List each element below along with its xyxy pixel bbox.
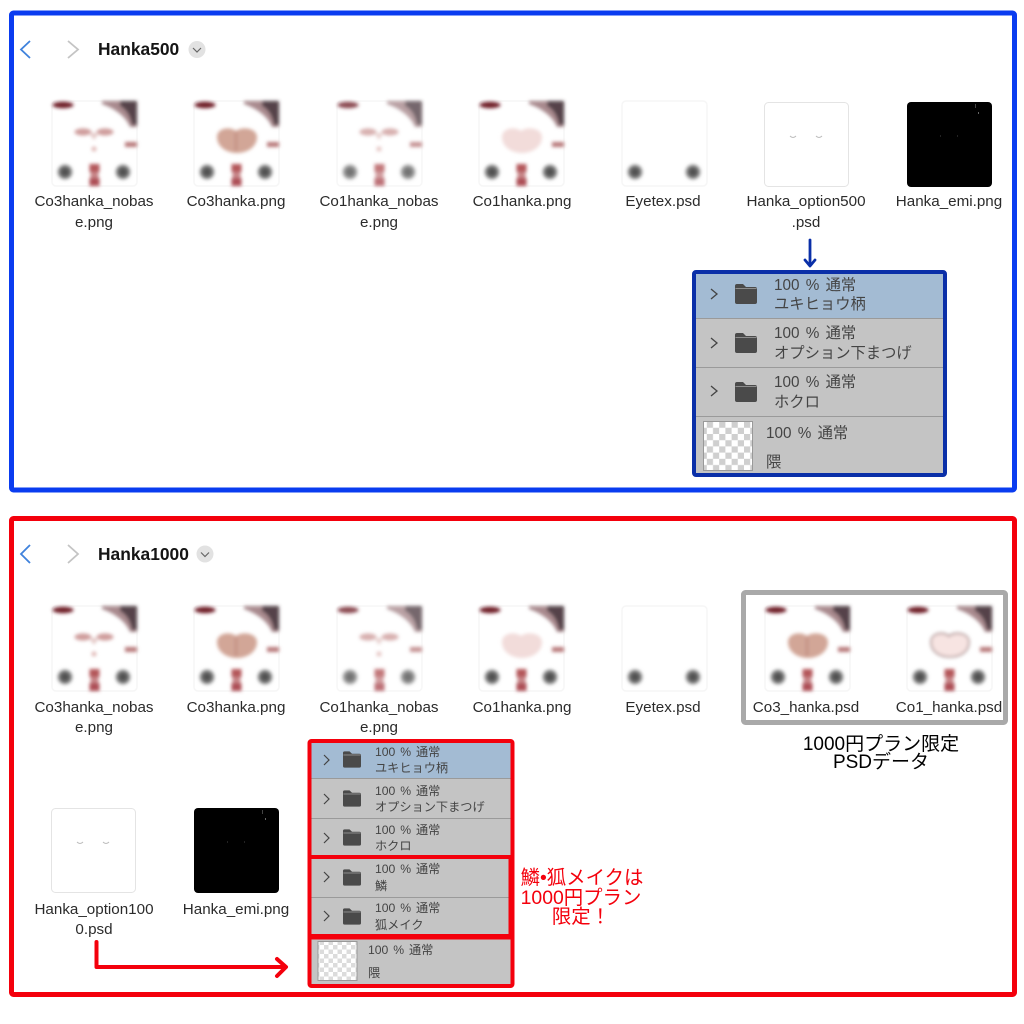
icon: back chevron	[21, 41, 30, 58]
file: Co3hanka.png	[187, 101, 285, 210]
panel: Hanka1000 folder	[12, 518, 1014, 994]
layer: ホクロ: ホクロ	[375, 839, 412, 853]
arrow: down to layers	[805, 240, 815, 266]
file: Co1hanka.png	[473, 101, 571, 210]
file: Eyetex.psd	[622, 606, 707, 716]
file: Co3_hanka.psd	[753, 606, 859, 716]
layer: ホクロ: ホクロ	[774, 394, 820, 411]
file: Hanka_emi.png	[183, 808, 289, 918]
file: Hanka_option500.psd	[746, 102, 866, 231]
layer: ユキヒョウ柄: ユキヒョウ柄	[774, 296, 866, 313]
layer: 隈: 100 % 通常	[766, 425, 848, 442]
outline: 1000 plan layers	[310, 857, 510, 936]
file: Co1_hanka.psd	[896, 606, 1002, 716]
callout: limited to 1000 yen plan: 1000円プラン	[521, 887, 641, 909]
file: Co1hanka_nobase.png	[319, 606, 439, 736]
file: Hanka_emi.png	[896, 102, 1002, 210]
layer: ホクロ	[324, 823, 440, 853]
layer: 隈	[704, 422, 848, 471]
file: Co1hanka_nobase.png: Co1hanka_nobas	[319, 193, 439, 210]
layer: ユキヒョウ柄: ユキヒョウ柄	[375, 761, 448, 775]
layer: 隈: 隈	[368, 966, 380, 980]
layer: オプション下まつげ	[324, 784, 485, 814]
file: Co1hanka.png	[473, 606, 571, 716]
file: Eyetex.psd	[622, 101, 707, 210]
file: Co1hanka.png: Co1hanka.png	[473, 699, 571, 716]
caption: PSD data: 1000円プラン限定	[803, 733, 959, 755]
heading: Hanka1000: Hanka1000	[98, 544, 189, 564]
icon: dropdown button	[188, 41, 206, 58]
file: Hanka_emi.png: Hanka_emi.png	[183, 901, 289, 918]
layer: ユキヒョウ柄	[696, 274, 943, 318]
arrow: option file to layers	[96, 942, 286, 976]
layer: 隈: 100 % 通常	[368, 943, 433, 957]
file: Co3hanka_nobase.png	[34, 101, 154, 231]
callout: limited to 1000 yen plan	[521, 867, 643, 928]
file: Co3hanka_nobase.png: e.png	[75, 214, 113, 231]
layer: 狐メイク: 狐メイク	[375, 918, 424, 932]
outline: bottom layer	[310, 936, 512, 940]
layer: 鱗: 100 % 通常	[375, 862, 440, 876]
file: Co1hanka_nobase.png: e.png	[360, 719, 398, 736]
file: Co3hanka_nobase.png	[34, 606, 154, 736]
file: Co3_hanka.psd: Co3_hanka.psd	[753, 699, 859, 716]
file: Hanka_option1000.psd	[34, 808, 154, 938]
callout: limited to 1000 yen plan: 鱗•狐メイクは	[521, 867, 643, 889]
file: Hanka_option500.psd: .psd	[792, 214, 820, 231]
layer: 鱗	[324, 862, 440, 893]
layer: オプション下まつげ: オプション下まつげ	[375, 800, 485, 814]
layer: オプション下まつげ	[711, 325, 912, 362]
file: Co3hanka_nobase.png: Co3hanka_nobas	[34, 699, 154, 716]
file: Hanka_emi.png: Hanka_emi.png	[896, 193, 1002, 210]
layer: 隈: 隈	[766, 454, 781, 471]
file: Hanka_option1000.psd: Hanka_option100	[34, 901, 154, 918]
icon: forward chevron	[68, 545, 78, 563]
file: Co3hanka.png: Co3hanka.png	[187, 699, 285, 716]
icon: back chevron	[21, 545, 30, 563]
layer: ホクロ	[711, 374, 856, 411]
layer: 鱗: 鱗	[375, 879, 387, 893]
layer: オプション下まつげ: 100 % 通常	[375, 784, 440, 798]
caption: PSD data	[803, 733, 959, 773]
icon: forward chevron	[68, 41, 78, 58]
layer: ユキヒョウ柄: 100 % 通常	[375, 745, 440, 759]
icon: dropdown button	[196, 546, 214, 562]
file: Co1hanka.png: Co1hanka.png	[473, 193, 571, 210]
layer: 狐メイク	[324, 901, 440, 932]
layer: 狐メイク: 100 % 通常	[375, 901, 440, 915]
file: Co1hanka_nobase.png: Co1hanka_nobas	[319, 699, 439, 716]
caption: PSD data: PSDデータ	[833, 751, 929, 773]
file: Co3hanka.png: Co3hanka.png	[187, 193, 285, 210]
layer: 隈	[318, 942, 433, 980]
file: Hanka_option500.psd: Hanka_option500	[746, 193, 866, 210]
panel: layer list 500	[694, 272, 945, 475]
layer: ユキヒョウ柄	[311, 743, 511, 778]
file: Co3hanka_nobase.png: Co3hanka_nobas	[34, 193, 154, 210]
highlight: PSD files box	[744, 592, 1006, 722]
file: Co3hanka_nobase.png: e.png	[75, 719, 113, 736]
layer: ホクロ: 100 % 通常	[774, 374, 856, 391]
layer: ホクロ: 100 % 通常	[375, 823, 440, 837]
file: Eyetex.psd: Eyetex.psd	[625, 699, 701, 716]
panel: layer list 1000	[310, 741, 512, 986]
panel: Hanka500 folder	[12, 13, 1014, 490]
file: Hanka_option1000.psd: 0.psd	[75, 921, 113, 938]
file: Eyetex.psd: Eyetex.psd	[625, 193, 701, 210]
layer: オプション下まつげ: オプション下まつげ	[774, 345, 912, 362]
heading: Hanka500: Hanka500	[98, 39, 179, 59]
callout: limited to 1000 yen plan: 限定！	[552, 906, 610, 928]
file: Co1hanka_nobase.png	[319, 101, 439, 231]
file: Co3hanka.png	[187, 606, 285, 716]
file: Co1_hanka.psd: Co1_hanka.psd	[896, 699, 1002, 716]
layer: オプション下まつげ: 100 % 通常	[774, 325, 856, 342]
layer: ユキヒョウ柄: 100 % 通常	[774, 277, 856, 294]
file: Co1hanka_nobase.png: e.png	[360, 214, 398, 231]
outline: full list	[310, 741, 512, 986]
